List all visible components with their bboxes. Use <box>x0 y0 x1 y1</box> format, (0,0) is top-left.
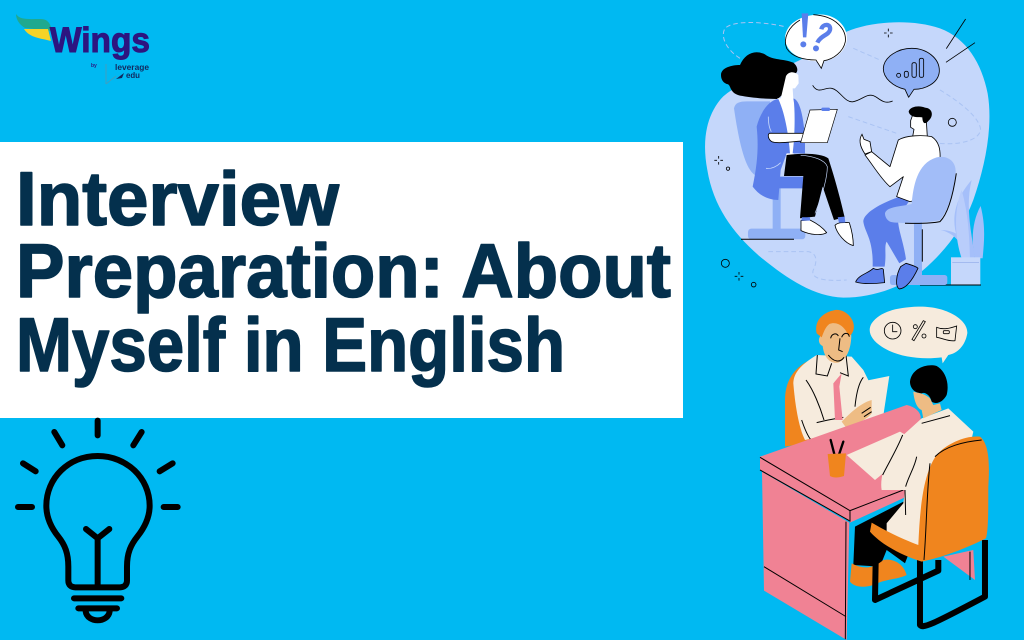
woman's chair <box>734 101 805 239</box>
woman's arm <box>768 133 810 143</box>
exclamation speech bubble <box>785 13 847 68</box>
man's shoes <box>856 263 918 289</box>
man's neck and face <box>911 115 927 137</box>
woman's trousers <box>784 154 845 220</box>
candidate shoes <box>850 560 907 587</box>
socks <box>801 217 845 223</box>
desk far leg <box>943 550 975 580</box>
man's hand <box>860 134 872 154</box>
interviewer chair <box>785 362 827 447</box>
candidate face <box>913 392 942 418</box>
man's torso <box>865 136 940 202</box>
logo: Wings by Leverage Edu: by <box>91 63 97 69</box>
interviewer tie <box>825 373 843 420</box>
interviewer face details <box>828 333 849 361</box>
man's legs <box>863 197 910 267</box>
candidate chair <box>870 436 989 562</box>
interviewer face <box>819 320 851 363</box>
logo: Wings by Leverage Edu <box>16 14 150 84</box>
small circles and sparkles <box>714 29 956 287</box>
clipboard <box>801 109 837 143</box>
woman's top <box>777 98 794 155</box>
thought bubble <box>870 307 967 363</box>
conversation squiggle <box>813 85 893 102</box>
interviewer body <box>793 355 883 440</box>
woman's shoes <box>801 220 853 246</box>
woman's face <box>781 72 799 99</box>
floor line <box>741 239 981 285</box>
man's chair seat <box>885 157 956 223</box>
title: Myself in English <box>16 303 565 388</box>
logo: Wings by Leverage Edu: edu <box>126 71 140 80</box>
logo: Wings by Leverage Edu: Wings <box>50 21 150 60</box>
bubble glyphs <box>800 13 830 51</box>
paper on desk <box>847 432 920 480</box>
woman's coat <box>753 99 790 200</box>
desk side <box>850 487 907 523</box>
title panel <box>0 142 683 418</box>
bulb rays <box>18 421 178 507</box>
interviewer hand <box>842 400 872 428</box>
chair legs <box>875 540 985 626</box>
bulb base <box>74 598 121 620</box>
signal bars <box>897 58 924 77</box>
desk top <box>760 405 921 522</box>
spark lines <box>946 19 975 62</box>
title <box>16 157 671 388</box>
candidate trousers <box>853 500 917 567</box>
title: Preparation: About <box>16 229 671 314</box>
woman's hair <box>721 52 797 99</box>
plant <box>941 180 984 258</box>
icon: light bulb <box>18 421 178 620</box>
desk front <box>762 472 849 640</box>
man's hair <box>909 106 932 123</box>
dashed lines <box>723 22 981 280</box>
logo: Wings by Leverage Edu: leverage <box>115 63 150 72</box>
background blob <box>705 22 989 298</box>
chart speech bubble <box>883 48 939 97</box>
interviewer hair <box>816 310 854 337</box>
man's chair <box>890 220 947 285</box>
desk <box>760 405 975 640</box>
plant pot <box>951 257 980 285</box>
candidate hair <box>910 365 948 403</box>
illustration: two people talking <box>705 13 989 298</box>
bulb glass <box>46 456 150 587</box>
candidate body <box>881 408 973 550</box>
title: Interview <box>16 157 340 242</box>
bulb filament <box>86 529 109 585</box>
illustration: job interview at a desk <box>760 307 989 640</box>
paper in hand <box>853 376 889 429</box>
bubble icons <box>884 321 957 341</box>
pencil cup <box>828 440 846 477</box>
